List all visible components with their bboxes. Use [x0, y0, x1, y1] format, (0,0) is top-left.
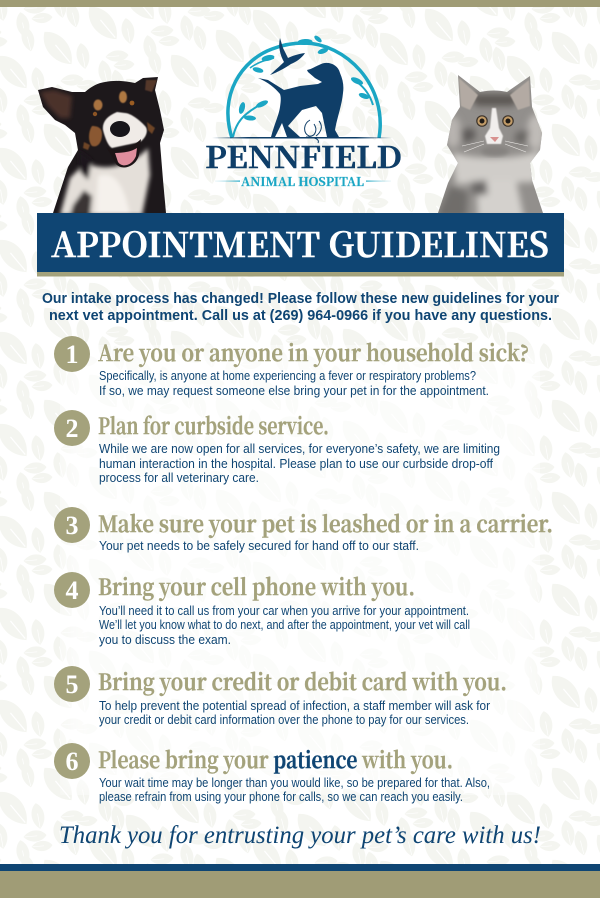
step 6: 6	[66, 747, 78, 776]
step 1: Are you or anyone in your household sick?	[98, 337, 529, 368]
step 2	[54, 410, 500, 485]
logo subtitle: ANIMAL HOSPITAL	[241, 173, 364, 190]
step 2: 2	[66, 414, 78, 443]
title: APPOINTMENT GUIDELINES	[51, 218, 549, 267]
step 3: 3	[66, 511, 78, 540]
title banner	[37, 213, 564, 276]
logo branches and leaves	[233, 34, 373, 137]
step 3	[54, 507, 553, 553]
cat face markings	[462, 108, 528, 156]
step 1: 1	[66, 340, 78, 369]
logo cat outline	[305, 120, 321, 143]
step 6: Your wait time may be longer than you would like, so be prepared for that. Also,	[99, 776, 490, 790]
step 1: Specifically, is anyone at home experiencing a fever or respiratory problems?	[99, 369, 476, 383]
dog face markings	[83, 91, 155, 167]
step 6	[54, 743, 490, 804]
step 2: While we are now open for all services, for everyone’s safety, we are limiting	[99, 442, 500, 456]
step 2: process for all veterinary care.	[99, 471, 259, 485]
bottom band	[0, 864, 600, 898]
step 3: Your pet needs to be safely secured for hand off to our staff.	[99, 539, 419, 553]
step 6: please refrain from using your phone for calls, so we can reach you easily.	[99, 790, 463, 804]
logo dog silhouette	[258, 63, 343, 137]
step 4	[54, 571, 470, 647]
intro text: Our intake process has changed! Please follow these new guidelines for your	[42, 291, 559, 307]
closing message: Thank you for entrusting your pet’s care with us!	[59, 822, 541, 849]
step 6: Please bring your patience with you.	[98, 744, 453, 775]
step 1: If so, we may request someone else bring your pet in for the appointment.	[99, 384, 489, 398]
step 4: Bring your cell phone with you.	[98, 571, 415, 602]
step 3: Make sure your pet is leashed or in a carrier.	[98, 508, 553, 539]
step 4: You’ll need it to call us from your car when you arrive for your appointment.	[99, 604, 469, 618]
step 5	[54, 666, 507, 727]
photo: dog	[38, 77, 166, 213]
dog chest fur	[60, 148, 150, 215]
step 4: We’ll let you know what to do next, and after the appointment, your vet will call	[99, 618, 470, 632]
step 4: you to discuss the exam.	[99, 633, 231, 647]
photo: cat	[438, 75, 543, 213]
logo arc	[228, 43, 380, 138]
step 4: 4	[66, 576, 78, 605]
top bar	[0, 0, 600, 7]
logo wordmark: PENNFIELD	[205, 133, 402, 177]
step 1	[54, 336, 529, 398]
step 5: your credit or debit card information over the phone to pay for our services.	[99, 713, 469, 727]
intro text	[42, 291, 559, 324]
step 5: To help prevent the potential spread of infection, a staff member will ask for	[99, 699, 490, 713]
logo bird	[270, 38, 305, 75]
step 5: 5	[66, 670, 78, 699]
logo	[205, 34, 402, 190]
step 2: Plan for curbside service.	[98, 410, 329, 441]
step 5: Bring your credit or debit card with you.	[98, 666, 507, 697]
step 2: human interaction in the hospital. Please plan to use our curbside drop-off	[99, 457, 494, 471]
intro text: next vet appointment. Call us at (269) 964-0966 if you have any questions.	[49, 308, 552, 324]
logo ground line	[212, 137, 392, 138]
